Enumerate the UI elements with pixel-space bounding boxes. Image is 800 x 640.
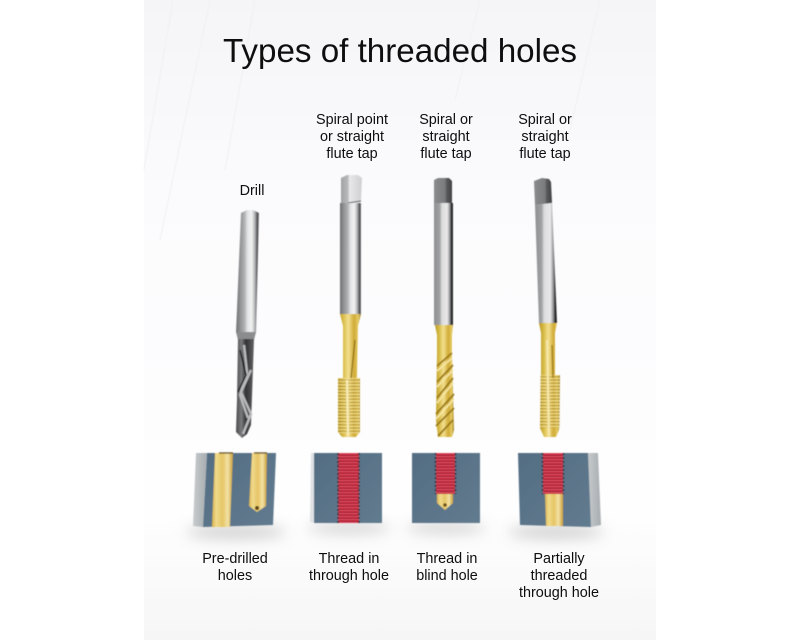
floor shadow: pre-drilled block (186, 525, 286, 539)
caption: partially threaded through hole: threaded (531, 568, 587, 584)
caption: partially threaded through hole (519, 551, 599, 601)
tool label: spiral point or straight flute tap: Spiral point (316, 112, 388, 128)
caption: pre-drilled holes: Pre-drilled (202, 551, 268, 567)
tool label: spiral point or straight flute tap: flute tap (326, 146, 378, 162)
caption: thread in through hole: Thread in (319, 551, 379, 567)
caption: pre-drilled holes (202, 551, 268, 584)
icon: drill bit (236, 210, 259, 438)
caption: thread in blind hole: blind hole (416, 568, 478, 584)
floor shadow: through hole block (307, 522, 391, 534)
caption: thread in blind hole (416, 551, 478, 584)
floor shadow: blind hole block (406, 522, 486, 534)
tool label: drill: Drill (240, 183, 264, 199)
tool label: spiral or straight flute tap, partial thread: straight (521, 129, 569, 145)
tool label: spiral or straight flute tap, partial thread: flute tap (519, 146, 571, 162)
title: Types of threaded holes (223, 33, 577, 70)
tool label: spiral or straight flute tap, blind hole: straight (422, 129, 470, 145)
block: partially threaded through hole (518, 453, 601, 527)
icon: straight flute tap (534, 178, 560, 437)
caption: thread in through hole (309, 551, 389, 584)
block: pre-drilled holes (193, 453, 276, 527)
caption: thread in through hole: through hole (309, 568, 389, 584)
caption: partially threaded through hole: through hole (519, 585, 599, 601)
block: thread in through hole (310, 453, 382, 523)
caption: thread in blind hole: Thread in (417, 551, 477, 567)
tool label: spiral or straight flute tap, partial thread (518, 112, 572, 162)
block: thread in blind hole (412, 453, 480, 523)
caption: pre-drilled holes: holes (218, 568, 252, 584)
floor shadow: partial thread block (508, 525, 604, 539)
background panel (144, 0, 656, 640)
tool label: spiral or straight flute tap, blind hole: Spiral or (419, 112, 473, 128)
tool label: spiral point or straight flute tap (316, 112, 388, 162)
tool label: spiral or straight flute tap, blind hole: flute tap (420, 146, 472, 162)
tool label: spiral or straight flute tap, partial thread: Spiral or (518, 112, 572, 128)
tool label: spiral or straight flute tap, blind hole (419, 112, 473, 162)
tool label: spiral point or straight flute tap: or straight (320, 129, 384, 145)
caption: partially threaded through hole: Partially (533, 551, 585, 567)
icon: spiral flute tap (434, 178, 454, 437)
icon: spiral point tap (338, 175, 362, 437)
